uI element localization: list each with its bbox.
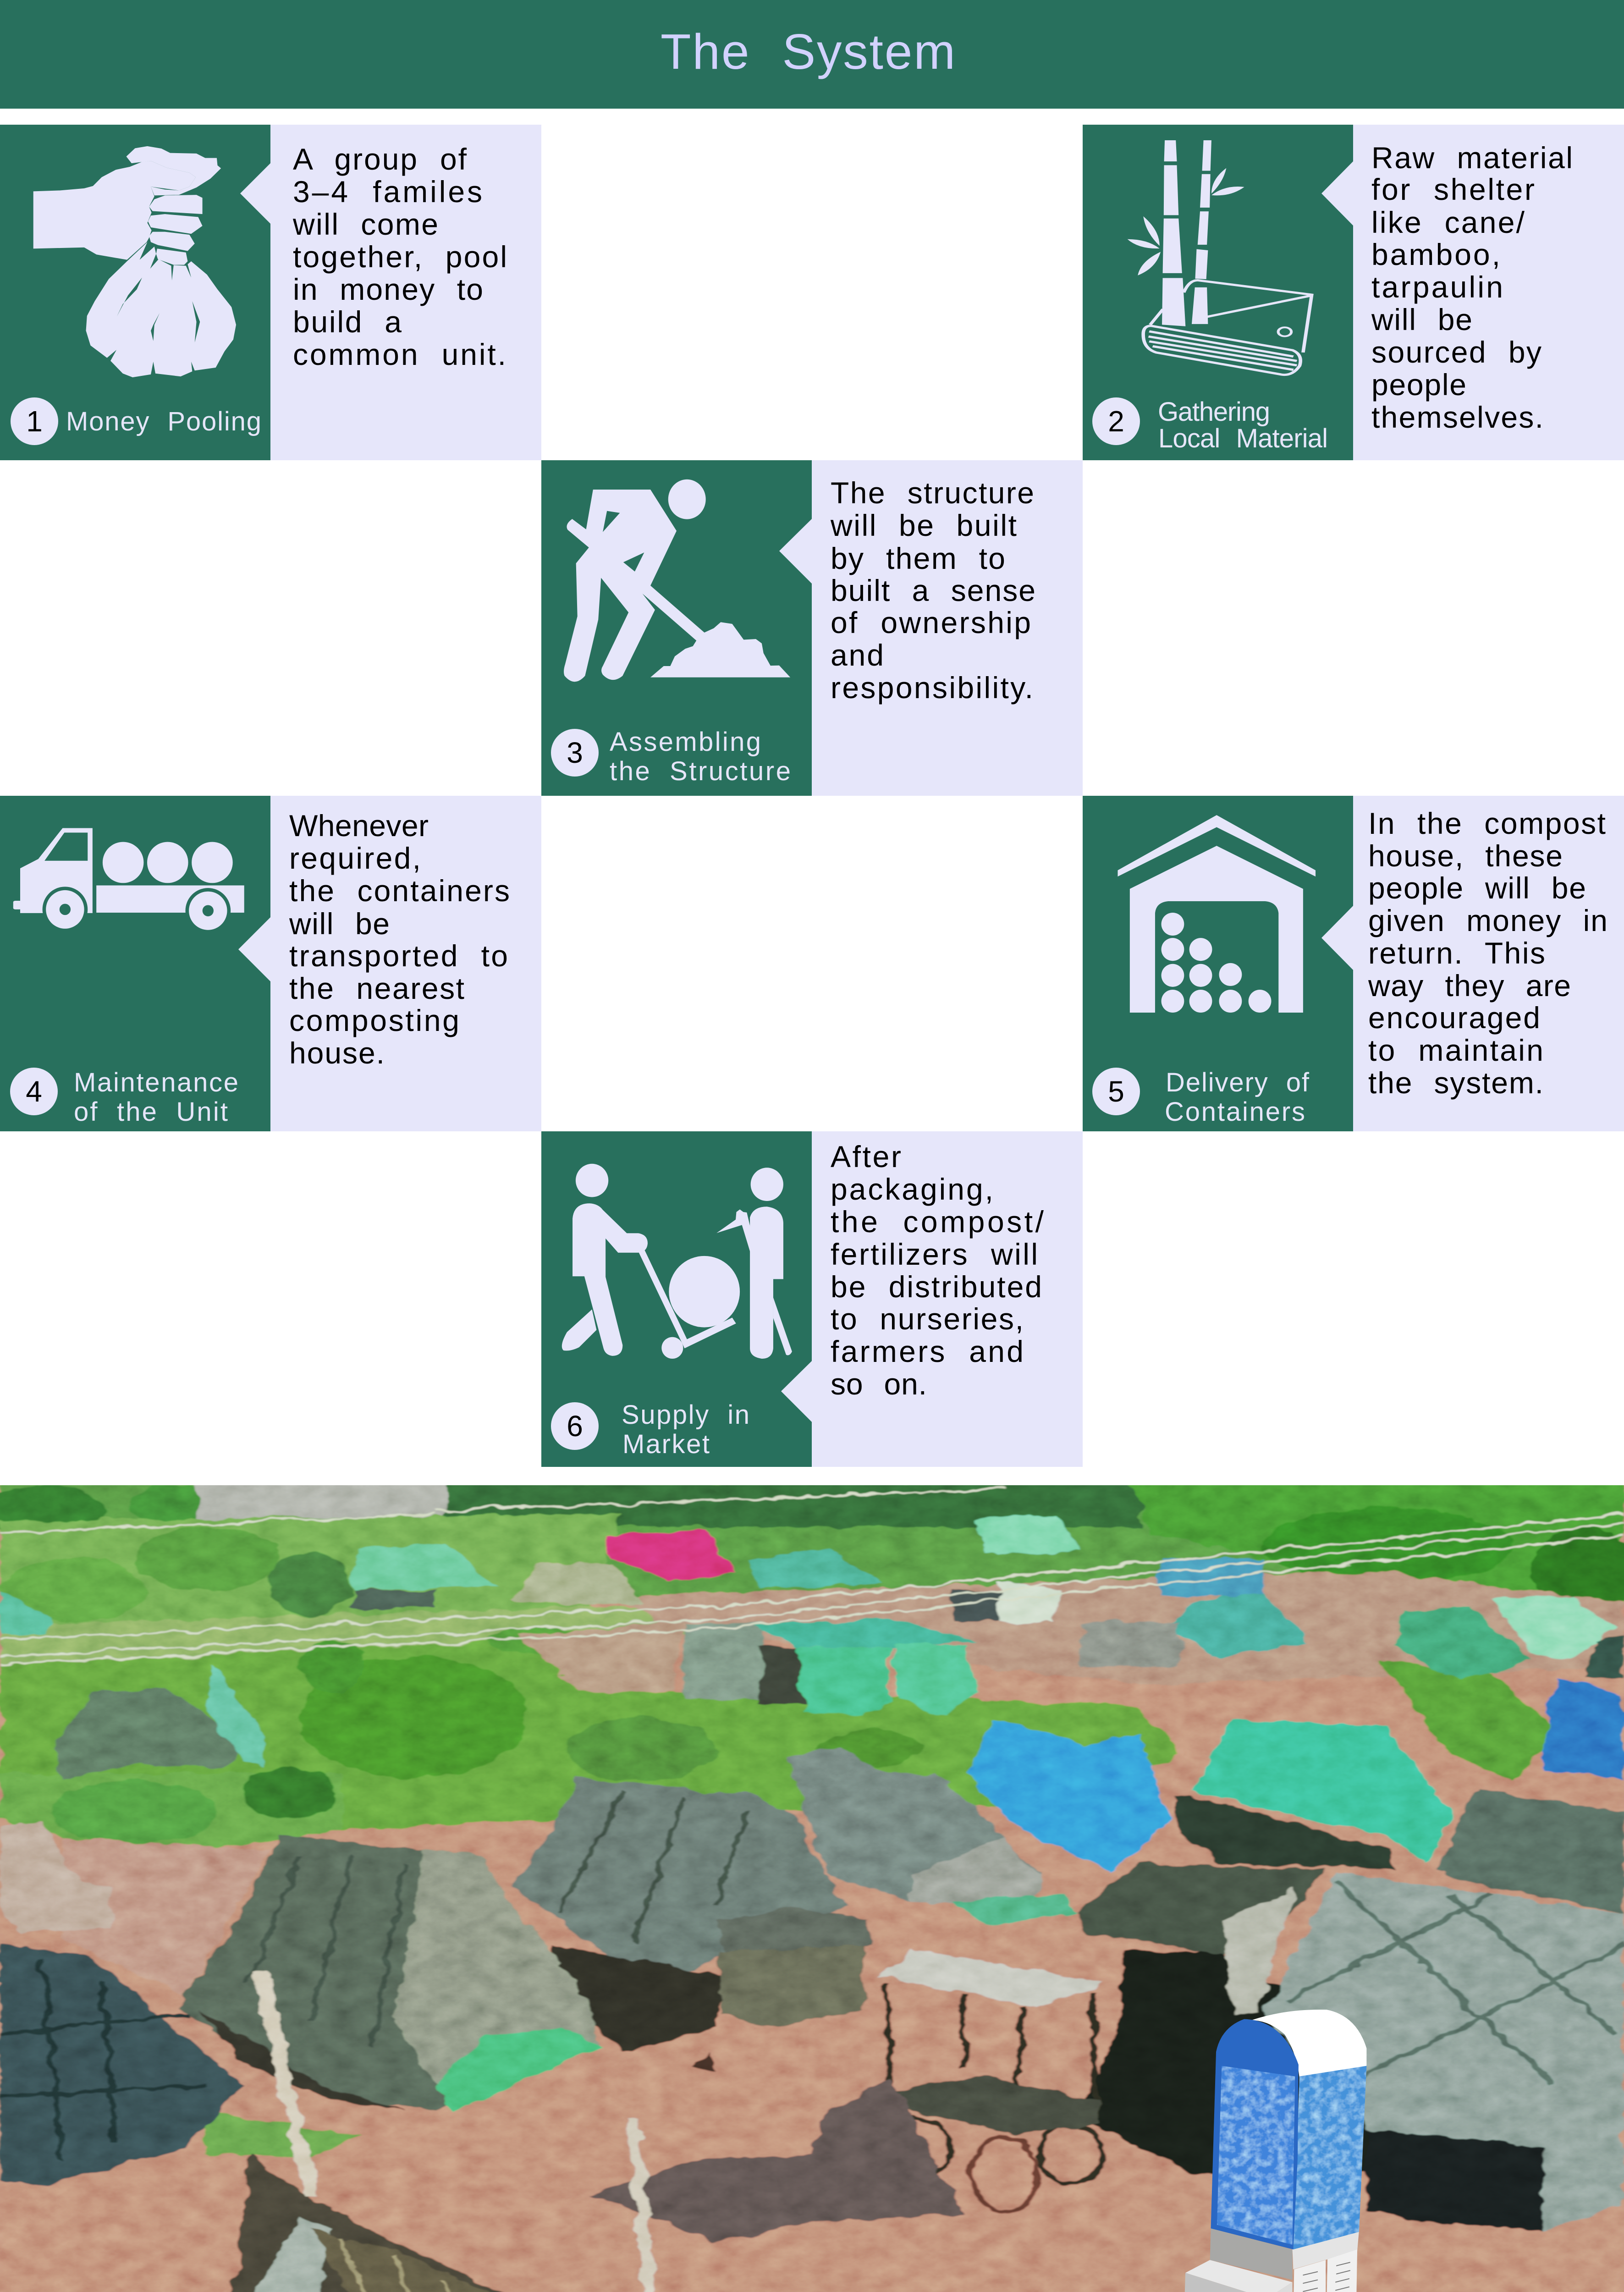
description 2 — [1371, 141, 1573, 434]
step number 3: 3 — [567, 736, 583, 769]
description 6 — [831, 1140, 1044, 1401]
label: Maintenance of the Unit: of the Unit — [74, 1097, 228, 1127]
description 5: people will be — [1368, 871, 1586, 905]
icon: compost house with containers — [1118, 815, 1316, 1013]
cabinet doors — [1293, 2249, 1357, 2292]
icon: worker shovelling — [564, 479, 790, 682]
description 3: will be built — [830, 508, 1017, 542]
description 6: farmers and — [831, 1334, 1024, 1368]
description 5: way they are — [1368, 969, 1571, 1003]
description 5: the system. — [1368, 1066, 1543, 1100]
label: Gathering Local Material: Gathering — [1158, 397, 1270, 427]
description 3: built a sense — [831, 573, 1035, 607]
description 2: people — [1371, 368, 1466, 402]
step number 1: 1 — [26, 405, 43, 438]
description 4: Whenever — [289, 809, 429, 843]
callout pointer 1 — [240, 163, 270, 224]
label: Maintenance of the Unit — [74, 1068, 238, 1127]
panel: step 2 gathering local material — [1083, 125, 1624, 460]
description 4: house. — [289, 1036, 385, 1070]
panel: step 3 assembling the structure — [541, 460, 1083, 796]
label: Assembling the Structure: the Structure — [610, 756, 791, 786]
panel: step 4 maintenance of the unit — [0, 796, 541, 1131]
description 6: After — [831, 1140, 901, 1174]
grey plinth — [1210, 2228, 1359, 2280]
label: Supply in Market — [622, 1400, 749, 1459]
description 4: the containers — [289, 874, 510, 908]
panel: step 5 delivery of containers — [1083, 796, 1624, 1131]
description 1: will come — [292, 207, 438, 241]
description 2: for shelter — [1371, 172, 1535, 206]
description 3: of ownership — [831, 606, 1031, 639]
description 2: bamboo, — [1371, 237, 1500, 271]
description 4 — [289, 809, 510, 1070]
label: Gathering Local Material: Local Material — [1158, 424, 1328, 453]
step number 6 — [551, 1402, 599, 1450]
description 3: responsibility. — [831, 671, 1033, 705]
description 3: and — [831, 638, 884, 672]
callout pointer 3 — [779, 519, 812, 584]
description 5: return. This — [1368, 936, 1545, 970]
description 5: to maintain — [1368, 1033, 1543, 1067]
description 2: Raw material — [1371, 141, 1573, 175]
callout pointer 5 — [1321, 906, 1353, 970]
white roof — [1251, 2010, 1366, 2077]
large gray tents — [512, 1777, 844, 1970]
step number 6: 6 — [567, 1410, 583, 1443]
label: Money Pooling: Money Pooling — [66, 407, 261, 436]
blue front inner panel — [1217, 2066, 1295, 2245]
description 5 — [1368, 806, 1607, 1100]
photo: tent settlement — [0, 1476, 1624, 2292]
step number 4 — [10, 1068, 58, 1115]
description 2: tarpaulin — [1371, 270, 1503, 304]
step number 4: 4 — [26, 1075, 42, 1108]
description 3: by them to — [831, 541, 1005, 575]
foreground thatched tent — [135, 2154, 683, 2292]
description 1: A group of — [293, 142, 467, 176]
label: Supply in Market: Supply in — [622, 1400, 749, 1430]
description 5: given money in — [1368, 904, 1607, 937]
step base — [1184, 2260, 1293, 2292]
step number 5 — [1092, 1068, 1140, 1115]
header band — [0, 0, 1624, 109]
label: Delivery of Containers: Containers — [1165, 1097, 1305, 1127]
description 1: common unit. — [293, 337, 506, 371]
description 4: transported to — [289, 939, 508, 973]
step number 3 — [551, 729, 599, 777]
step number 2: 2 — [1108, 405, 1124, 438]
icon: truck with containers — [13, 828, 244, 933]
description 6: fertilizers will — [831, 1237, 1038, 1271]
cart — [881, 1948, 1106, 2007]
description 6: so on. — [831, 1367, 927, 1401]
description 1: together, pool — [293, 240, 507, 274]
label: Assembling the Structure: Assembling — [610, 727, 761, 757]
description 1: 3–4 familes — [293, 175, 482, 209]
panel: step 1 money pooling — [0, 125, 541, 460]
description 5: In the compost — [1368, 806, 1606, 840]
blue side face — [1293, 2066, 1366, 2249]
step number 2 — [1092, 397, 1140, 445]
callout pointer 4 — [238, 917, 270, 981]
label: Assembling the Structure — [610, 727, 791, 786]
callout pointer 2 — [1321, 161, 1353, 226]
label: Maintenance of the Unit: Maintenance — [74, 1068, 238, 1097]
description 4: composting — [289, 1003, 459, 1037]
callout pointer 6 — [781, 1361, 812, 1422]
description 5: house, these — [1368, 839, 1563, 873]
step number 1 — [11, 397, 58, 445]
middle tents — [683, 1623, 765, 1699]
panel: step 6 supply in market — [541, 1131, 1083, 1467]
illustration: blue composting unit — [1184, 2010, 1366, 2292]
description 2: like cane/ — [1371, 205, 1525, 239]
label: Supply in Market: Market — [622, 1429, 710, 1459]
wires — [0, 1489, 1624, 1665]
description 5: encouraged — [1368, 1001, 1540, 1035]
description 6: the compost/ — [831, 1205, 1044, 1239]
label: Gathering Local Material — [1158, 397, 1328, 453]
blue front face — [1211, 2019, 1299, 2249]
description 2: themselves. — [1371, 400, 1543, 434]
description 3: The structure — [831, 476, 1034, 510]
description 4: the nearest — [289, 971, 464, 1005]
step number 5: 5 — [1108, 1075, 1124, 1108]
label: Delivery of Containers: Delivery of — [1166, 1068, 1310, 1097]
far tents — [0, 1590, 52, 1635]
description 2: will be — [1371, 303, 1472, 336]
icon: people with trolley — [562, 1164, 792, 1359]
description 4: required, — [289, 841, 421, 875]
icon: hand holding money bag — [33, 146, 236, 377]
description 4: will be — [289, 907, 390, 941]
description 1: build a — [293, 305, 402, 339]
vegetation and far ground — [0, 1485, 1624, 1598]
description 1: in money to — [293, 272, 483, 306]
label: Delivery of Containers — [1165, 1068, 1310, 1127]
description 6: packaging, — [831, 1172, 993, 1206]
icon: bamboo and tarpaulin roll — [1128, 140, 1312, 375]
description 3 — [830, 476, 1035, 705]
title: The System — [661, 24, 955, 80]
description 6: to nurseries, — [831, 1302, 1024, 1336]
description 6: be distributed — [831, 1270, 1042, 1304]
description 2: sourced by — [1371, 335, 1541, 369]
description 1 — [292, 142, 507, 371]
